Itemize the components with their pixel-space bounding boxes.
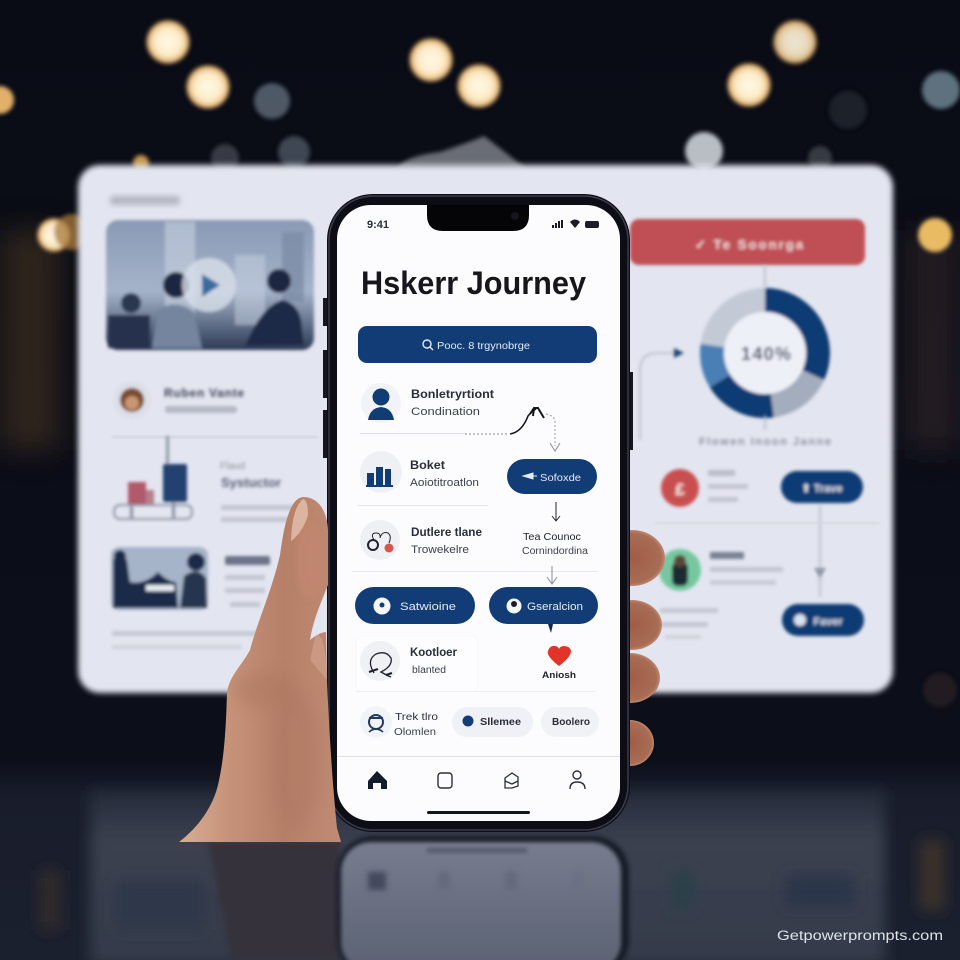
phone side buttons	[323, 298, 633, 458]
row 2 text	[410, 460, 479, 489]
watermark: Getpowerprompts.com	[777, 928, 943, 943]
video thumbnail	[106, 220, 314, 350]
red banner	[630, 219, 865, 265]
navy pill top: ⬆ Trave	[801, 483, 843, 495]
panel heading	[110, 196, 180, 205]
right hand fingers	[599, 530, 665, 766]
notch	[427, 205, 529, 231]
row 4 card	[356, 636, 478, 691]
connector label: Cornindordina	[522, 546, 588, 557]
profile row	[113, 381, 244, 419]
title: Hskerr Journey	[361, 265, 586, 301]
meeting photo	[111, 547, 208, 610]
icon: person	[361, 383, 401, 423]
footer lines	[112, 631, 267, 649]
connector arrows	[640, 265, 820, 597]
donut chart	[712, 300, 818, 406]
text block: middle: Systuctor	[221, 475, 281, 490]
bottom chip 2	[452, 707, 533, 737]
bottom chip 3: Boolero	[552, 716, 590, 728]
device illustration	[114, 436, 192, 519]
icon: user	[570, 771, 585, 789]
pill: operation	[489, 587, 598, 633]
pill: operation: Gseralcion	[527, 601, 583, 613]
left hand with thumb	[179, 497, 341, 842]
red profile row: £	[675, 480, 685, 499]
row 1 text	[411, 389, 494, 418]
row 1 text: Bonletryrtiont	[411, 389, 494, 401]
icon: heart with label	[542, 646, 576, 680]
profile row: Ruben Vante	[164, 386, 244, 400]
row 2 text: Boket	[410, 460, 445, 472]
phone	[323, 194, 633, 832]
icon: square	[438, 773, 452, 788]
background dashboard panel	[78, 165, 893, 693]
pill: solution	[507, 459, 597, 494]
row 4 text	[410, 647, 458, 676]
navy pill bottom: Faver	[813, 616, 843, 628]
row 3	[360, 520, 482, 560]
phone body	[327, 194, 630, 832]
icon: home	[368, 771, 387, 789]
arrow	[547, 566, 557, 584]
row 3 text: Trowekelre	[411, 544, 469, 556]
text block: middle	[220, 461, 309, 522]
tab bar	[368, 771, 585, 814]
connector label	[522, 532, 588, 557]
red profile row	[661, 469, 748, 507]
home indicator	[427, 811, 530, 814]
bottom chip 1	[360, 706, 438, 738]
navy pill bottom	[782, 604, 864, 636]
table surface and reflection	[40, 790, 944, 960]
row 2	[360, 451, 479, 493]
icon: box	[505, 773, 518, 788]
icon: buildings	[360, 451, 402, 493]
status bar: 9:41	[367, 219, 389, 231]
donut caption: Flowen Inoon Janne	[699, 436, 831, 448]
connector label: Tea Counoc	[523, 532, 581, 543]
green profile row	[659, 549, 783, 639]
search button	[358, 326, 597, 363]
donut chart: 140%	[741, 344, 791, 364]
phone screen	[337, 205, 620, 821]
row 1 text: Condination	[411, 406, 480, 418]
status bar	[367, 219, 599, 231]
row 1	[361, 383, 494, 423]
search button: Pooc. 8 trgynobrge	[437, 340, 530, 352]
arrow	[552, 502, 560, 521]
hand shading	[240, 536, 327, 701]
icon: shapes	[360, 520, 400, 560]
squiggle arrow	[465, 408, 560, 451]
thumbnail	[291, 499, 308, 541]
bottom chip 2: Sllemee	[480, 716, 521, 728]
warm room glow left	[0, 230, 960, 450]
row 4 text: blanted	[412, 665, 446, 676]
bottom chip 1: Olomlen	[394, 726, 436, 738]
row 3 text	[411, 527, 482, 556]
arrow heads	[674, 348, 826, 578]
text block: middle: Flaud	[220, 461, 245, 472]
icon: heart with label: Aniosh	[542, 670, 576, 680]
red banner: ✓ Te Soonrga	[695, 237, 804, 252]
pill: solution: Sofoxde	[540, 472, 581, 484]
pill: satwioine	[355, 587, 475, 624]
row 2 text: Aoiotitroatlon	[410, 477, 479, 489]
bottom chip 1: Trek tlro	[395, 711, 438, 723]
pill: satwioine: Satwioine	[400, 601, 456, 613]
bottom chip 3	[541, 707, 599, 737]
text block: lower	[225, 556, 270, 607]
navy pill top	[781, 471, 863, 503]
bokeh lights	[0, 20, 960, 707]
row 4 text: Kootloer	[410, 647, 458, 659]
icon: loop	[360, 641, 400, 681]
row 3 text: Dutlere tlane	[411, 527, 482, 539]
